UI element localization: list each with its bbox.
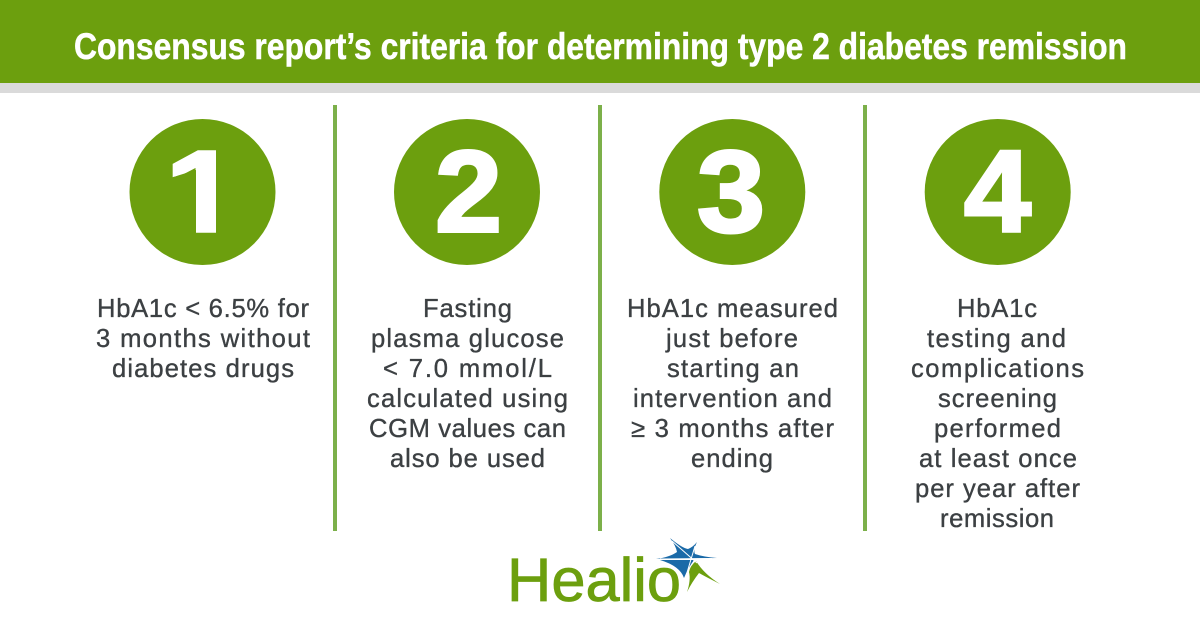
panel: criterion 3	[627, 119, 838, 473]
criterion 1 text: 3 months without	[96, 325, 310, 353]
number badge 4: 4	[964, 126, 1031, 256]
criterion 3 text: starting an	[667, 355, 799, 383]
number badge 2	[394, 119, 540, 265]
header band	[0, 0, 1200, 93]
criterion 3 text	[627, 295, 838, 473]
criterion 4 text: screening	[938, 385, 1057, 413]
criterion 3 text: HbA1c measured	[627, 295, 838, 323]
criterion 2 text: also be used	[390, 445, 545, 473]
logo star	[656, 538, 720, 592]
criterion 4 text: remission	[940, 505, 1054, 533]
criterion 2 text: < 7.0 mmol/L	[383, 355, 552, 383]
number badge 1	[130, 119, 276, 265]
criterion 4 text: performed	[934, 415, 1061, 443]
number badge 2: 2	[435, 126, 502, 256]
criterion 2 text: plasma glucose	[371, 325, 564, 353]
criterion 2 text: Fasting	[423, 295, 512, 323]
criterion 3 text: ≥ 3 months after	[631, 415, 834, 443]
criterion 2 text: CGM values can	[369, 415, 566, 443]
number badge 1: 1	[165, 126, 242, 256]
criterion 1 text	[96, 295, 310, 383]
panel: criterion 1	[96, 119, 310, 383]
number badge 3	[659, 119, 805, 265]
criterion 4 text: at least once	[919, 445, 1077, 473]
criterion 3 text: intervention and	[633, 385, 832, 413]
panel: criterion 2	[367, 119, 568, 473]
criterion 3 text: just before	[665, 325, 798, 353]
criterion 4 text	[911, 295, 1084, 533]
Healio logo	[507, 538, 720, 614]
criterion 2 text: calculated using	[367, 385, 568, 413]
number badge 3: 3	[697, 126, 765, 256]
logo wordmark: Healio	[507, 546, 681, 614]
criterion 4 text: testing and	[927, 325, 1066, 353]
criterion 1 text: diabetes drugs	[112, 355, 294, 383]
criterion 3 text: ending	[691, 445, 773, 473]
criterion 4 text: complications	[911, 355, 1084, 383]
column dividers	[333, 105, 867, 531]
criterion 2 text	[367, 295, 568, 473]
criterion 1 text: HbA1c < 6.5% for	[97, 295, 309, 323]
criterion 4 text: HbA1c	[957, 295, 1037, 323]
criterion 4 text: per year after	[915, 475, 1080, 503]
panel: criterion 4	[911, 119, 1084, 533]
number badge 4	[925, 119, 1071, 265]
